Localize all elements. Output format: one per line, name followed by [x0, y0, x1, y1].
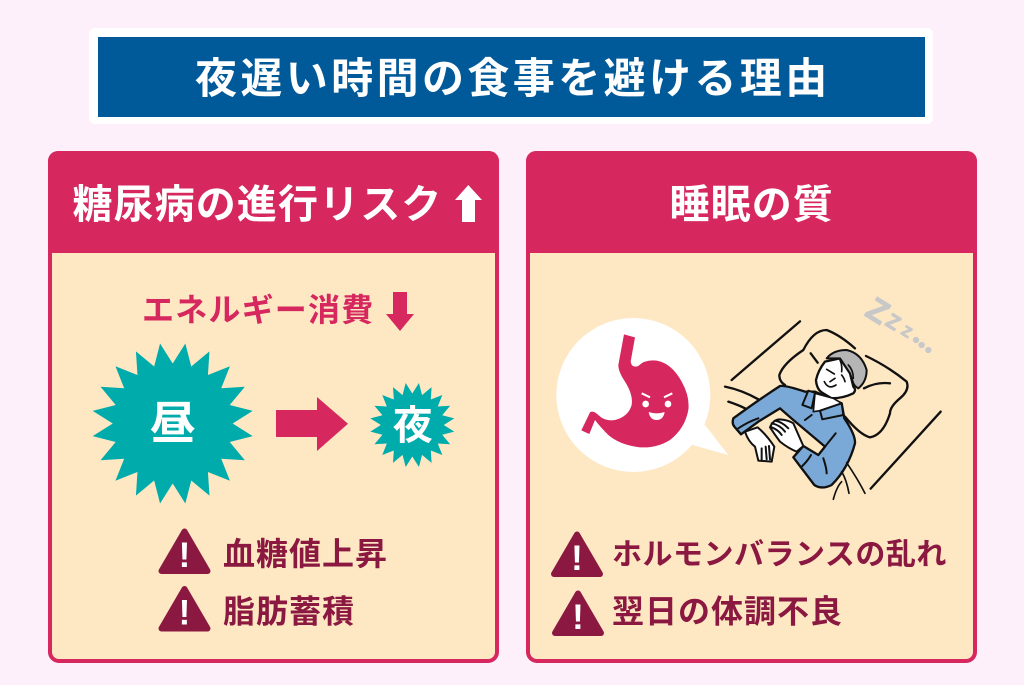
panel: sleep quality — [526, 151, 977, 661]
warning item: next-day malaise: ! — [572, 598, 584, 637]
daytime character: 昼 — [150, 397, 196, 449]
snoring zzz: Z — [860, 289, 896, 331]
snoring zzz: Z — [898, 323, 914, 342]
warning item: body fat: ! — [179, 594, 190, 632]
arrow: day to night — [276, 397, 348, 451]
night character: 夜 — [393, 404, 433, 448]
text: blood sugar rise: 血糖値上昇 — [223, 536, 388, 572]
warning item: hormone balance: ! — [571, 539, 583, 578]
warning item: body fat — [162, 589, 355, 632]
title banner — [89, 28, 933, 124]
illustration: sleeping man — [725, 321, 941, 499]
text: next-day malaise: 翌日の体調不良 — [612, 594, 843, 630]
warning item: next-day malaise — [555, 594, 843, 637]
right heading text: 睡眠の質 — [670, 183, 834, 227]
hand on chest — [770, 419, 803, 452]
warning item: blood sugar — [162, 532, 388, 575]
panel: diabetes progression risk — [48, 151, 499, 661]
warning item: hormone balance — [554, 534, 947, 578]
right panel header — [526, 151, 977, 253]
shirt — [733, 386, 855, 487]
illustration: stomach speech bubble — [556, 318, 728, 472]
pillow — [779, 330, 907, 437]
warning item: blood sugar: ! — [179, 536, 190, 575]
snoring zzz: Z — [881, 309, 905, 336]
burst: daytime — [93, 343, 253, 504]
snoring zzz — [860, 289, 931, 353]
icon: up arrow — [455, 185, 482, 222]
icon: down arrow — [386, 292, 414, 331]
icon: angry stomach — [581, 334, 689, 447]
burst: night — [370, 383, 454, 467]
text: fat accumulation: 脂肪蓄積 — [223, 594, 355, 630]
hair — [827, 350, 867, 388]
left heading text: 糖尿病の進行リスク — [72, 183, 442, 227]
title text: 夜遅い時間の食事を避ける理由 — [195, 55, 831, 102]
neck and collar — [813, 393, 842, 412]
face — [816, 358, 855, 398]
hand hanging — [745, 427, 774, 462]
text: hormone imbalance: ホルモンバランスの乱れ — [612, 538, 947, 572]
energy consumption label: エネルギー消費 — [142, 292, 374, 328]
left panel header — [48, 151, 499, 253]
blanket folds — [833, 463, 865, 499]
